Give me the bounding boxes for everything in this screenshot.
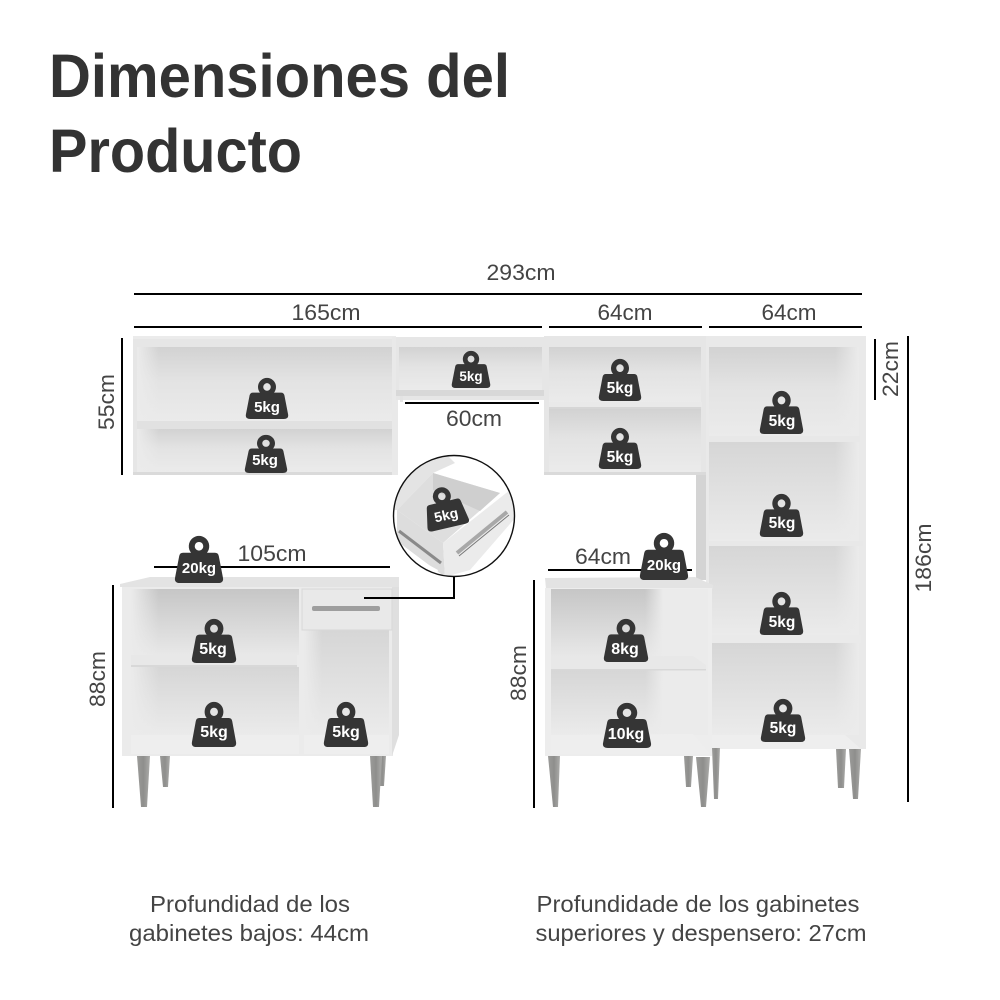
drawer front — [302, 589, 392, 630]
weight: 5kg upper middle top — [599, 359, 641, 401]
dimension: 165cm: 165cm — [292, 300, 360, 325]
weight: 5kg left upper shelf — [192, 619, 236, 663]
weight: 5kg drawer column — [324, 702, 368, 747]
note: upper cabinet depth — [536, 891, 866, 946]
weight: 10kg — [603, 703, 651, 748]
title — [49, 42, 510, 185]
weight: 5kg upper left — [246, 378, 288, 419]
weight: 10kg: 10kg — [608, 726, 644, 743]
wall cabinet: centre bridge unit — [396, 337, 546, 402]
dimension: 55cm: 55cm — [94, 374, 119, 430]
dimension: 64cm upper right: 64cm — [762, 300, 816, 325]
drawer detail callout — [393, 455, 516, 577]
base cabinet right legs — [548, 756, 710, 807]
wall cabinet: left two-shelf unit — [133, 336, 398, 475]
dimension: 293cm: 293cm — [486, 260, 556, 285]
dimension: 88cm left: 88cm — [85, 651, 110, 707]
dimension: 105cm: 105cm — [238, 541, 306, 566]
dimension: 60cm: 60cm — [446, 406, 502, 431]
note: upper cabinet depth: Profundidade de los gabinetes — [536, 891, 860, 917]
weight: 20kg left top: 20kg — [182, 560, 216, 577]
tall pantry cabinet — [696, 336, 866, 749]
note: upper cabinet depth: superiores y despensero: 27cm — [536, 920, 866, 946]
weight: 5kg lower left: 5kg — [252, 452, 278, 469]
callout connector line — [364, 577, 454, 598]
weight: 8kg: 8kg — [611, 641, 639, 658]
note: base cabinet depth: gabinetes bajos: 44cm — [129, 920, 369, 946]
weight: 5kg bridge — [452, 351, 490, 388]
weight: 5kg tall second: 5kg — [769, 515, 795, 532]
dimension: 186cm: 186cm — [911, 524, 936, 592]
weight: 5kg tall first — [760, 391, 803, 434]
weight: 20kg right top — [640, 533, 688, 580]
weight: 5kg bridge: 5kg — [459, 369, 483, 384]
weight: 5kg left bottom shelf — [192, 702, 236, 747]
weight: 5kg upper middle bottom: 5kg — [607, 449, 633, 466]
weight: 5kg drawer column: 5kg — [332, 724, 360, 741]
dimension: 55cm — [94, 338, 123, 475]
base cabinet left legs — [137, 756, 386, 807]
weight: 5kg upper left: 5kg — [254, 399, 280, 416]
weight: 20kg left top — [175, 536, 223, 583]
base cabinet left — [120, 577, 399, 756]
weight: 5kg tall fourth: 5kg — [770, 720, 796, 737]
tall cabinet legs — [712, 748, 861, 799]
weight: 5kg tall first: 5kg — [769, 413, 795, 430]
dimension: 64cm lower: 64cm — [575, 544, 631, 569]
base cabinet right — [545, 577, 713, 756]
weight: 8kg — [604, 619, 648, 662]
weight: 5kg upper middle bottom — [599, 428, 641, 469]
weight: 5kg tall third: 5kg — [769, 614, 795, 631]
title: Producto — [49, 117, 302, 185]
dimension: 22cm: 22cm — [878, 341, 903, 397]
title: Dimensiones del — [49, 42, 510, 110]
drawer weight 5kg: 5kg — [433, 504, 460, 525]
weight: 5kg lower left — [245, 435, 287, 473]
dimension: 60cm — [405, 402, 539, 431]
wall cabinet: right two-shelf unit — [544, 336, 706, 475]
weight: 5kg tall second — [760, 494, 803, 537]
note: base cabinet depth — [129, 891, 369, 946]
weight: 5kg upper middle top: 5kg — [607, 380, 633, 397]
weight: 5kg left upper shelf: 5kg — [199, 641, 227, 658]
weight: 20kg right top: 20kg — [647, 557, 681, 574]
note: base cabinet depth: Profundidad de los — [150, 891, 350, 917]
weight: 5kg tall fourth — [761, 699, 805, 742]
dimension: 64cm upper middle: 64cm — [598, 300, 652, 325]
dimension: 88cm right: 88cm — [506, 645, 531, 701]
weight: 5kg left bottom shelf: 5kg — [200, 724, 228, 741]
weight: 5kg tall third — [760, 592, 803, 635]
